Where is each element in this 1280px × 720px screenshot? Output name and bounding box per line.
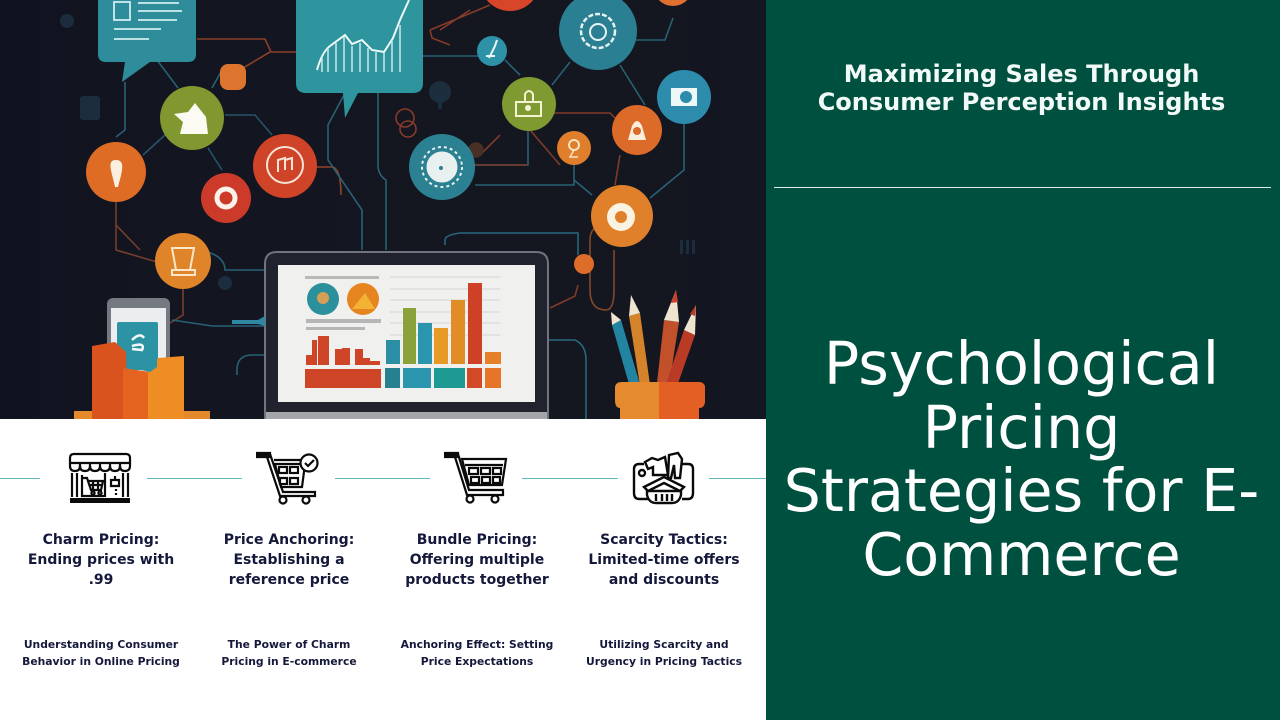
connector plug [232,316,265,326]
caption: anchoring effect [400,638,553,668]
caption: anchoring effect: Price Expectations [421,655,533,668]
laptop with dashboard [265,252,548,419]
icon nodes [86,0,711,289]
icon: storefront [68,452,132,503]
pencil cup [611,290,705,419]
main title: Strategies for E- [784,457,1259,525]
caption: anchoring effect: Anchoring Effect: Setting [401,638,553,651]
panel: illustration [0,0,766,419]
caption: scarcity and urgency: Utilizing Scarcity and [599,638,729,651]
main title [784,330,1259,588]
step: bundle pricing: Bundle Pricing: [417,532,537,548]
step: scarcity tactics: Limited-time offers [588,552,740,568]
timeline connector [0,478,766,479]
step: scarcity tactics: Scarcity Tactics: [600,532,728,548]
step: price anchoring [224,532,354,588]
faint background icons [60,14,695,290]
subtitle: Maximizing Sales Through [844,60,1199,88]
step: scarcity tactics: and discounts [609,572,719,588]
caption: power of charm pricing: The Power of Charm [228,638,350,651]
subtitle: Consumer Perception Insights [818,88,1225,116]
step: charm pricing: .99 [89,572,113,588]
speech bubble: line chart [296,0,423,118]
icon: online shop basket [632,452,694,504]
orange boxes [74,342,210,419]
circuit wires [116,5,684,419]
icon: shopping cart [444,452,508,504]
caption: consumer behavior: Behavior in Online Pricing [22,655,180,668]
caption: scarcity and urgency: Urgency in Pricing Tactics [586,655,742,668]
step: price anchoring: reference price [229,572,349,588]
caption: power of charm pricing: Pricing in E-commerce [221,655,357,668]
step: price anchoring: Price Anchoring: [224,532,354,548]
step: price anchoring: Establishing a [233,552,345,568]
step: bundle pricing: Offering multiple [410,552,544,568]
caption: power of charm pricing [221,638,357,668]
main title: Pricing [923,394,1120,462]
main title: Commerce [862,520,1181,588]
subtitle [818,60,1225,116]
phone [107,298,170,388]
caption: consumer behavior [22,638,180,668]
step: charm pricing: Charm Pricing: [43,532,159,548]
step: charm pricing [28,532,174,588]
main title: Psychological [824,330,1219,398]
icon: cart with checkmark [256,452,319,505]
speech bubble: document [98,0,196,82]
caption: consumer behavior: Understanding Consumer [24,638,178,651]
step: charm pricing: Ending prices with [28,552,174,568]
caption: scarcity and urgency [586,638,742,668]
step: bundle pricing: products together [405,572,549,588]
step: bundle pricing [405,532,549,588]
panel: title [766,0,1280,720]
step: scarcity tactics [588,532,740,588]
